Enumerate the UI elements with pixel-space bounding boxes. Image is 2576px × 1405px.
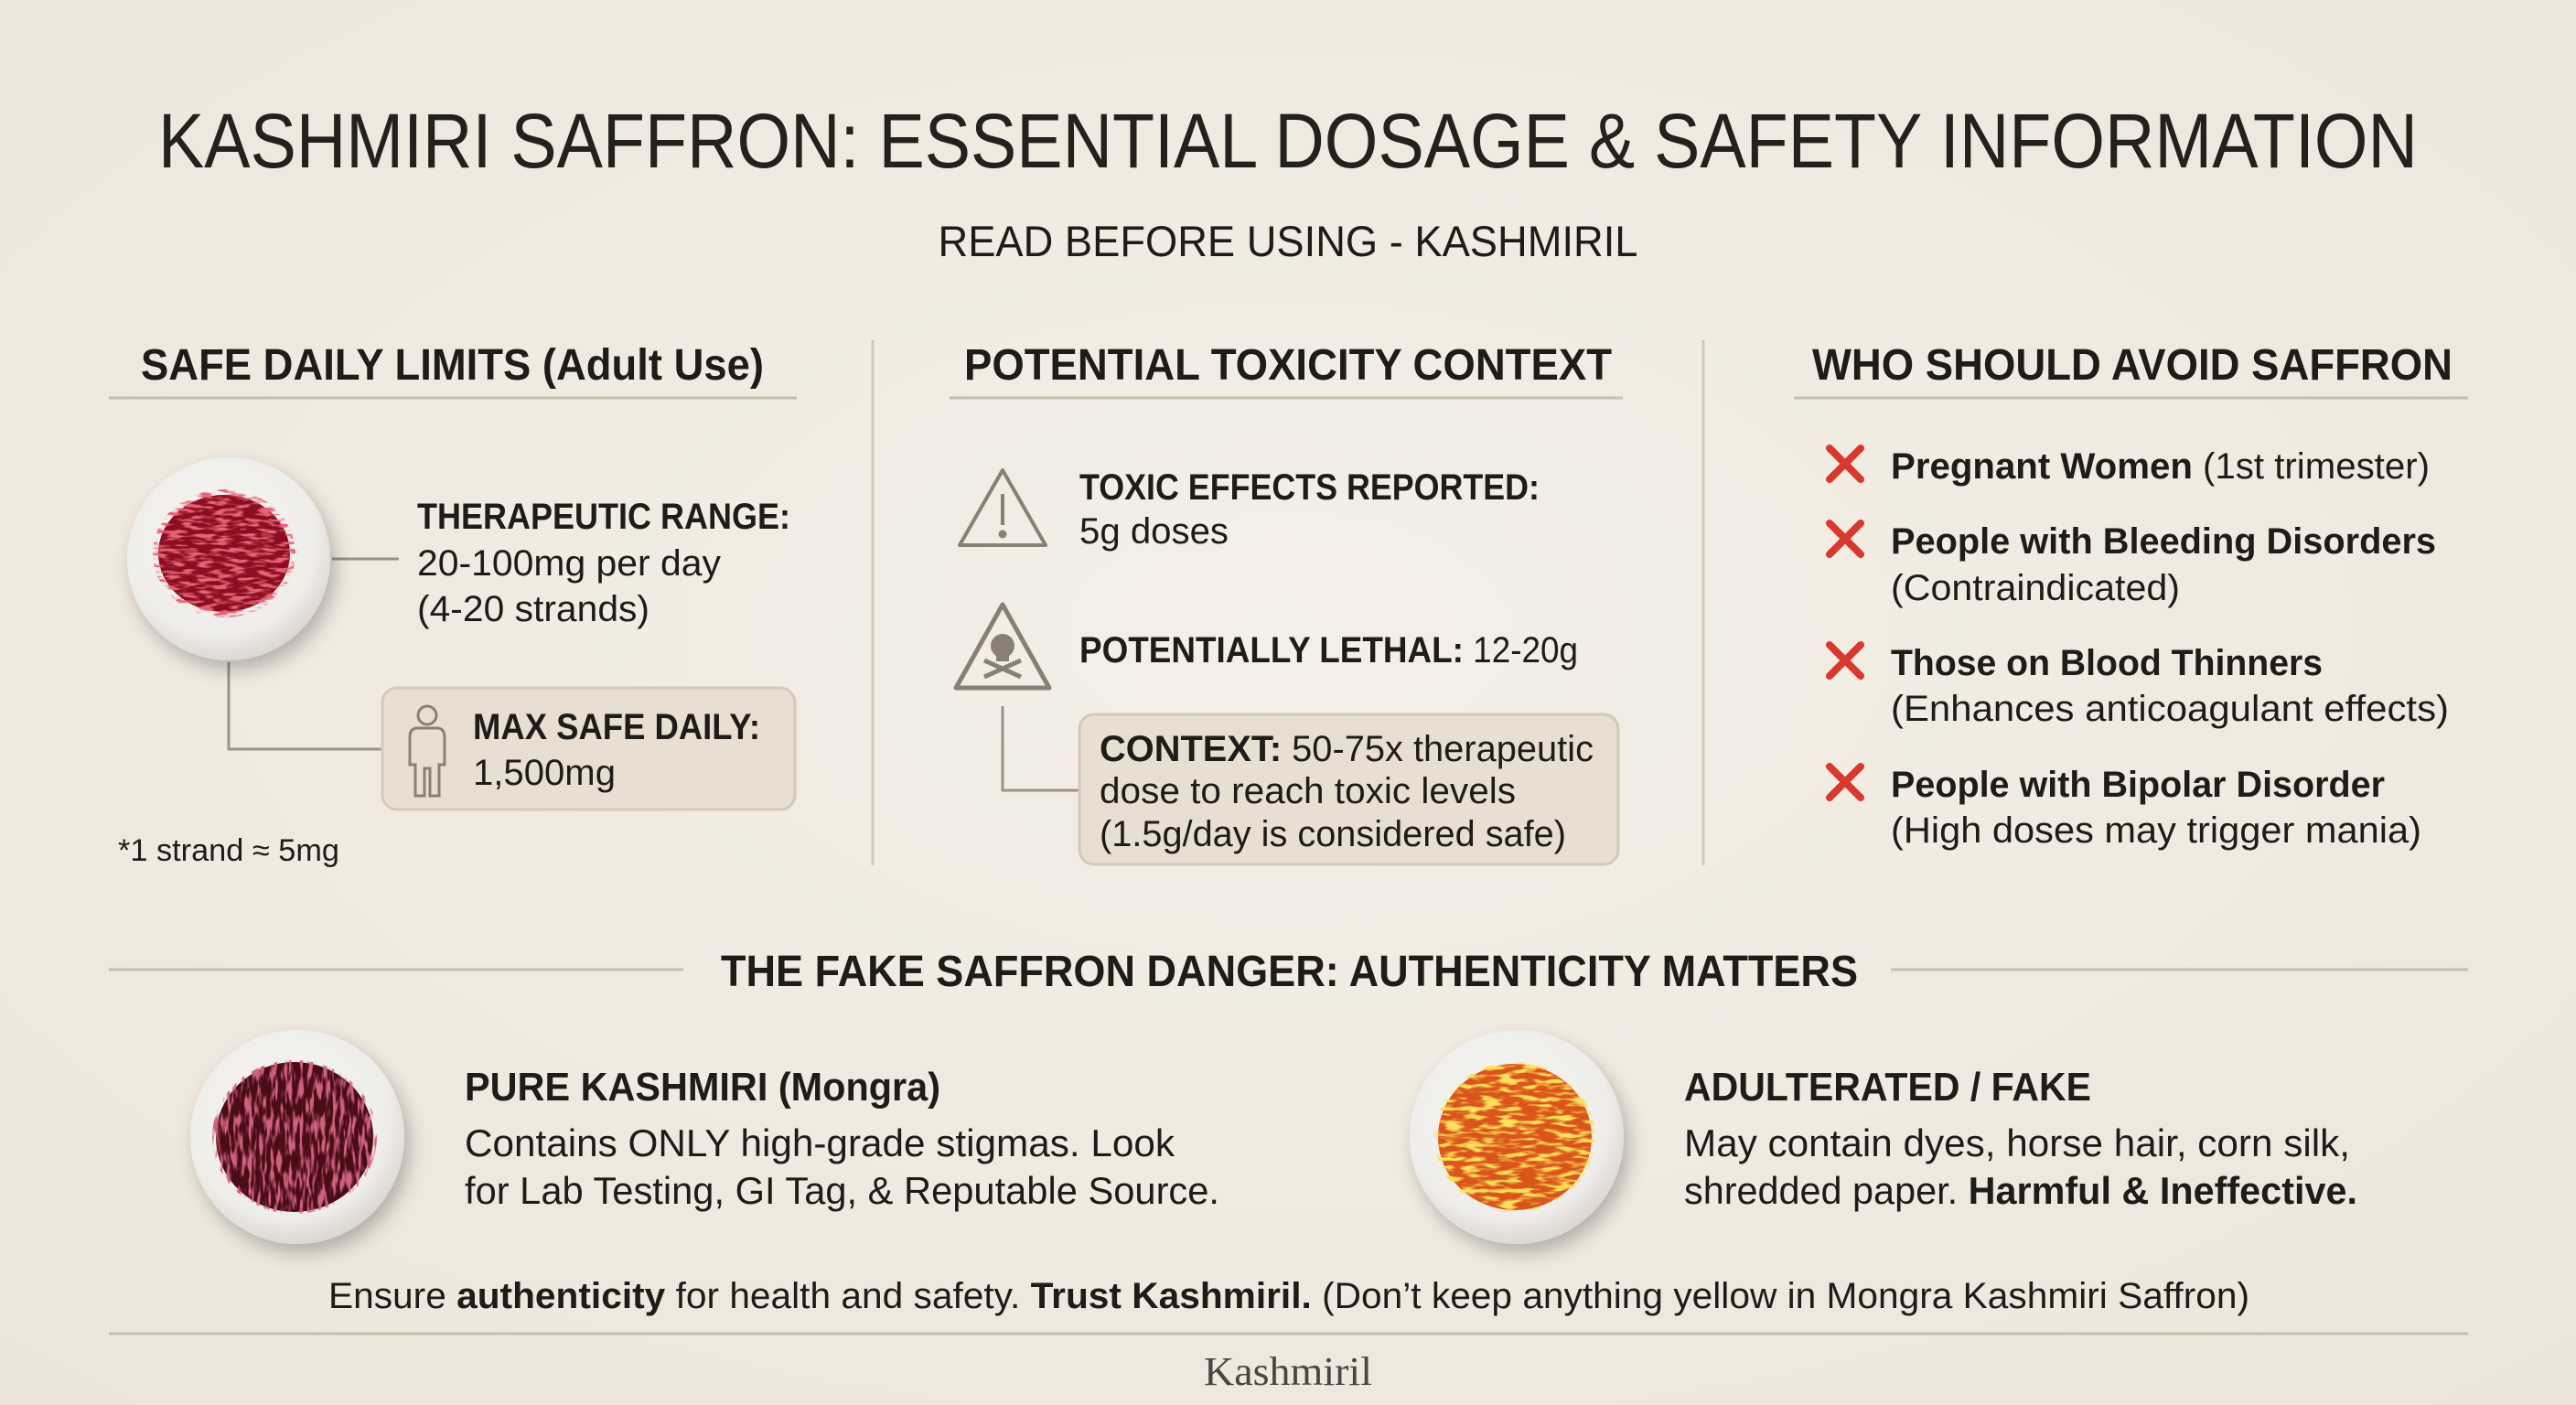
list item: blood thinners: (Enhances anticoagulant effects)	[1891, 689, 2449, 729]
therapeutic range text: 20-100mg per day	[417, 543, 721, 584]
panel: who should avoid	[1830, 446, 2449, 851]
callout: context: CONTEXT: 50-75x therapeutic	[1100, 729, 1594, 769]
callout: max safe daily: MAX SAFE DAILY:	[473, 707, 760, 747]
list item: blood thinners	[1830, 643, 2449, 729]
icon: person	[410, 706, 445, 796]
list item: bleeding: (Contraindicated)	[1891, 568, 2180, 608]
callout: context: dose to reach toxic levels	[1100, 771, 1516, 811]
list item: bipolar: (High doses may trigger mania)	[1891, 810, 2421, 851]
heading: who should avoid: WHO SHOULD AVOID SAFFRON	[1812, 341, 2453, 390]
heading: safe daily limits: SAFE DAILY LIMITS (Adult Use)	[141, 341, 764, 390]
heading: fake saffron danger: THE FAKE SAFFRON DANGER: AUTHENTICITY MATTERS	[721, 948, 1858, 996]
brand name: Kashmiril	[1204, 1349, 1372, 1394]
footnote: *1 strand ≈ 5mg	[118, 833, 339, 868]
list item: blood thinners: Those on Blood Thinners	[1891, 643, 2323, 683]
panel: adulterated fake: shredded paper. Harmful & Ineffective.	[1684, 1169, 2357, 1212]
toxic effects text: 5g doses	[1079, 511, 1229, 552]
icon: dark saffron bowl	[190, 1030, 404, 1244]
list item: bleeding	[1830, 521, 2436, 608]
heading: toxicity: POTENTIAL TOXICITY CONTEXT	[964, 341, 1612, 390]
panel: adulterated fake	[1410, 1030, 2357, 1244]
subtitle: READ BEFORE USING - KASHMIRIL	[939, 217, 1637, 265]
panel: safe daily limits	[118, 457, 795, 868]
callout: context	[1079, 714, 1618, 864]
toxic effects text	[1079, 467, 1540, 552]
list item: bipolar: People with Bipolar Disorder	[1891, 765, 2385, 805]
panel: pure kashmiri	[190, 1030, 1219, 1244]
therapeutic range text: THERAPEUTIC RANGE:	[417, 497, 790, 537]
panel: pure kashmiri: PURE KASHMIRI (Mongra)	[465, 1065, 940, 1110]
panel: pure kashmiri: Contains ONLY high-grade stigmas. Look	[465, 1121, 1175, 1164]
icon: skull warning	[956, 605, 1049, 688]
panel: adulterated fake: May contain dyes, horse hair, corn silk,	[1684, 1121, 2350, 1164]
icon: saffron bowl	[127, 457, 330, 660]
panel: adulterated fake: ADULTERATED / FAKE	[1684, 1065, 2091, 1110]
therapeutic range text: (4-20 strands)	[417, 589, 649, 629]
therapeutic range text	[417, 497, 790, 629]
panel: toxicity	[956, 467, 1618, 864]
list item: bipolar	[1830, 765, 2421, 851]
list item: pregnant: Pregnant Women (1st trimester)	[1891, 446, 2430, 487]
icon: warning	[960, 470, 1046, 545]
icon: fake saffron bowl	[1410, 1030, 1624, 1244]
callout: max safe daily	[382, 688, 795, 810]
lethal text: POTENTIALLY LETHAL: 12-20g	[1079, 630, 1578, 670]
callout: max safe daily: 1,500mg	[473, 753, 616, 793]
footer statement: Ensure authenticity for health and safety. Trust Kashmiril. (Don’t keep anything yellow in Mongra Kashmiri Saffron)	[328, 1276, 2249, 1316]
list item: bleeding: People with Bleeding Disorders	[1891, 521, 2436, 562]
connector lines	[229, 559, 399, 749]
panel: pure kashmiri: for Lab Testing, GI Tag, & Reputable Source.	[465, 1169, 1219, 1212]
toxic effects text: TOXIC EFFECTS REPORTED:	[1079, 467, 1540, 508]
callout: context: (1.5g/day is considered safe)	[1100, 814, 1566, 854]
